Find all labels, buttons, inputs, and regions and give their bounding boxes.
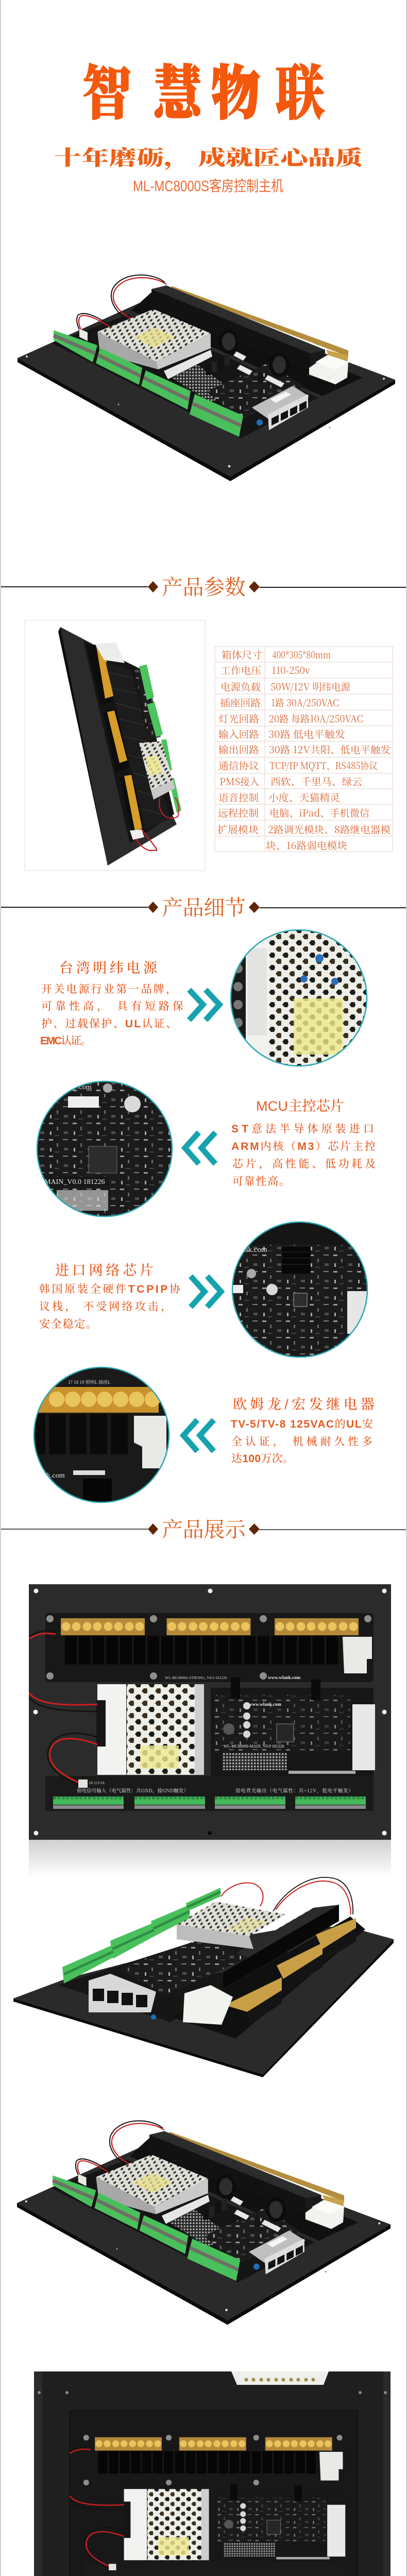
spec table: 30路 低电平触发 [268,727,345,741]
spec table: 插座回路 [220,696,261,709]
photo: front view plate: WL-MC8000S-STRONG_V0.0 181226 [165,1675,227,1680]
detail: network chip text: 进口网络芯片 [55,1263,154,1278]
arrow: right chevrons [189,990,219,1020]
spec table: TCP/IP MQTT、RS485协议 [269,758,378,772]
spec table: 语音控制 [218,790,259,804]
spec table: 灯光回路 [218,711,259,725]
spec table: 1路 30A/250VAC [271,696,339,709]
spec table: 电源负载 [221,680,261,693]
detail: MCU text: 芯片，高性能、低功耗及 [232,1158,376,1171]
detail photo: MCU chip: MAIN_V0.0 181226 [44,1178,105,1186]
detail: power supply text: EMC认证。 [40,1035,91,1047]
detail: power supply text: 护、过载保护、UL认证、 [41,1018,177,1030]
detail: MCU text: 可靠性高。 [232,1176,290,1188]
spec table: 通信协议 [218,758,259,772]
spec table: 输入回路 [218,727,259,741]
spec table [215,647,393,852]
spec table: 小度、天猫精灵 [268,790,340,804]
photo: front view plate: 弱电信号输入（电气属性：共GND，接GND触发） [77,1787,189,1794]
arrow: right chevrons [191,1276,221,1307]
photo: board installed in enclosure [34,2371,391,2576]
spec table: 50W/12V 明纬电源 [270,680,351,693]
spec table: 400*305*80mm [272,648,331,662]
detail photo: relays: nk.com [43,1472,65,1480]
photo: front view plate: www.wlank.com [249,1702,282,1707]
page border: left [0,0,1,2576]
arrow: left chevrons [185,1132,215,1164]
spec table: 工作电压 [221,663,261,677]
section heading: details: 产品细节 [162,891,246,921]
title: 智慧物联 [82,47,325,131]
spec table: 30路 12V共阳、低电平触发 [269,742,391,756]
photo: front view plate: DC12V3A [89,1781,105,1785]
section heading: parameters: 产品参数 [162,570,246,601]
spec table: 西软、千里马、绿云 [270,774,362,788]
detail: MCU text: MCU主控芯片 [256,1098,344,1114]
slogan: 十年磨砺， 成就匠心品质 [54,142,363,171]
photo: front view plate: 弱电背光输出（电气属性：共+12V，低电平触发） [235,1787,353,1794]
photo: front view plate [29,1584,391,1877]
product photo: isometric board [18,275,395,481]
arrow: left chevrons [183,1420,214,1451]
spec table: 远程控制 [218,806,259,820]
spec table: 块、16路弱电模块 [266,838,347,852]
detail: network chip text: 议栈， 不受网络攻击， [39,1301,172,1313]
detail: power supply text: 开关电源行业第一品牌， [41,984,177,996]
detail: network chip text [39,1263,181,1330]
section heading: showcase: 产品展示 [162,1513,246,1543]
photo: front view plate: WL-MC8000S-MAIN_V0.0 181226 [224,1744,284,1749]
detail photo: network chip [232,1222,369,1359]
detail: relay text: 全认证， 机械耐久性多 [231,1436,372,1448]
detail: relay text: 欧姆龙/宏发继电器 [233,1397,375,1412]
section heading: details [1,891,406,921]
detail photo: relays: 17 18 19 照明L 插座L [68,1379,111,1385]
detail: power supply text [40,960,183,1047]
detail photo: MCU chip: .com [77,1083,92,1091]
photo: front view plate: www.wlank.com [268,1675,301,1680]
detail: power supply text: 可靠性高， 具有短路保 [41,1001,183,1013]
spec table: 20路 每路10A/250VAC [269,711,363,725]
photo panel: vertical board [25,620,205,871]
detail photo: MCU chip [36,1081,173,1218]
spec table: PMS接入 [219,774,259,788]
photo: rear three-quarter view [13,1877,394,2077]
page border: right [406,0,407,2576]
detail photo: power supply [230,929,367,1066]
spec table: 扩展模块 [217,822,259,836]
section heading: parameters [1,570,406,601]
detail: MCU text: ARM内核（M3）芯片主控 [231,1141,376,1153]
photo: isometric board repeat [17,2121,391,2325]
spec table: 110-250v [272,663,311,677]
detail: relay text: 达100万次。 [231,1453,294,1465]
model name: ML-MC8000S客房控制主机 [133,178,283,195]
section heading: showcase [1,1513,406,1543]
detail: network chip text: 韩国原装全硬件TCPIP协 [39,1283,181,1295]
detail photo: network chip: nk.com [244,1246,267,1254]
detail: relay text [231,1397,375,1465]
spec table: 箱体尺寸 [222,648,262,662]
detail: network chip text: 安全稳定。 [39,1318,97,1330]
detail: MCU text [231,1098,376,1188]
spec table: 输出回路 [218,742,259,756]
spec table: 电脑、iPad、手机微信 [269,806,369,820]
detail: relay text: TV-5/TV-8 125VAC的UL安 [231,1418,374,1430]
detail: MCU text: ST 意法半导体原装进口 [231,1123,374,1135]
spec table: 2路调光模块、8路继电器模 [268,822,391,836]
detail photo: relays [33,1366,170,1504]
detail: power supply text: 台湾明纬电源 [59,960,158,976]
